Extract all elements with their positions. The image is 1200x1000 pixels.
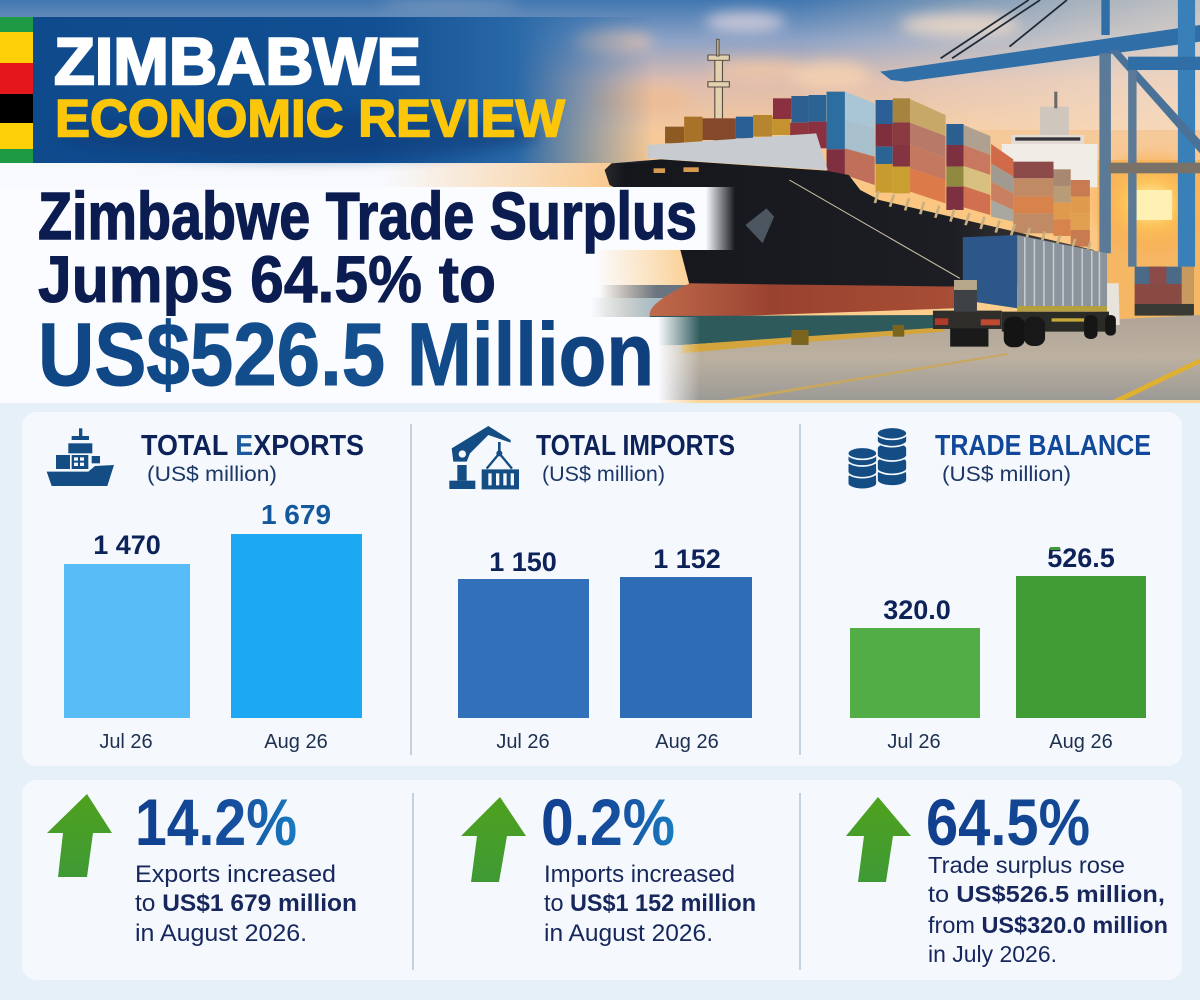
hero photo: cargo ship at port bbox=[0, 0, 1200, 403]
description: Trade surplus rose bbox=[928, 852, 1125, 878]
banner subtitle: ECONOMIC REVIEW: ECONOMIC REVIEW bbox=[55, 90, 565, 148]
axis labels: Jul 26 bbox=[99, 731, 153, 753]
stat: trade surplus bbox=[846, 785, 1168, 967]
unit: (US$ million) bbox=[542, 463, 665, 486]
value 1 679: 1 679 bbox=[261, 499, 331, 530]
ground bbox=[600, 315, 1200, 400]
heading: TOTAL IMPORTS bbox=[536, 430, 735, 462]
pale sky band behind bow bbox=[0, 250, 700, 317]
distant superstructure bbox=[1002, 92, 1098, 187]
axis labels bbox=[496, 731, 719, 753]
bar Aug 26 bbox=[231, 534, 362, 718]
value 1 470: 1 470 bbox=[93, 530, 161, 560]
value 526.5: 526.5 bbox=[1047, 543, 1115, 573]
stat: exports bbox=[47, 785, 357, 947]
description: Imports increased bbox=[544, 861, 735, 888]
ship mast bbox=[708, 39, 729, 140]
white headline backing fades bbox=[0, 163, 735, 403]
unit: (US$ million) bbox=[147, 463, 277, 486]
icon: up arrow bbox=[461, 797, 526, 882]
icon: up arrow bbox=[846, 797, 911, 882]
top banner bbox=[33, 17, 653, 163]
axis labels bbox=[887, 731, 1113, 753]
bar Aug 26 bbox=[1016, 576, 1146, 718]
chart: total exports bbox=[47, 428, 364, 753]
bar Jul 26 bbox=[850, 628, 980, 718]
far containers truck bbox=[1135, 267, 1194, 316]
containers bbox=[665, 92, 1090, 247]
description: from US$320.0 million bbox=[928, 912, 1168, 938]
description: Exports increased bbox=[135, 861, 336, 888]
panel: percentage changes bbox=[22, 780, 1182, 980]
description: in August 2026. bbox=[544, 920, 713, 947]
truck bbox=[933, 235, 1120, 347]
hull red waterline bbox=[650, 283, 956, 316]
stat: imports bbox=[461, 785, 756, 947]
description: to US$1 152 million bbox=[544, 890, 756, 917]
axis labels: Aug 26 bbox=[1049, 731, 1113, 753]
bar Jul 26 bbox=[64, 564, 190, 718]
description bbox=[928, 852, 1168, 967]
deck railing bbox=[876, 197, 1094, 250]
description: to US$1 679 million bbox=[135, 890, 357, 917]
icon: up arrow bbox=[47, 794, 112, 877]
axis labels: Aug 26 bbox=[264, 731, 328, 753]
percentage: 64.5% bbox=[926, 785, 1090, 859]
chart: total imports bbox=[449, 426, 752, 753]
unit: (US$ million) bbox=[942, 463, 1071, 486]
description bbox=[135, 861, 357, 947]
value 1 150: 1 150 bbox=[489, 547, 557, 577]
icon: coin stacks bbox=[848, 427, 907, 489]
description bbox=[544, 861, 756, 947]
crane bbox=[880, 0, 1200, 267]
heading: TOTAL EXPORTS bbox=[141, 430, 364, 462]
axis labels bbox=[99, 731, 328, 753]
value 1 152: 1 152 bbox=[653, 544, 721, 574]
icon: cargo ship bbox=[47, 428, 114, 486]
value 320.0: 320.0 bbox=[883, 595, 951, 625]
heading: TRADE BALANCE bbox=[935, 430, 1151, 462]
panel: bar charts bbox=[22, 412, 1182, 766]
chart: trade balance bbox=[848, 427, 1151, 753]
icon: port crane bbox=[449, 426, 519, 489]
banner title: ZIMBABWE: ZIMBABWE bbox=[54, 24, 421, 98]
headline bbox=[38, 179, 697, 404]
distant shoreline bbox=[590, 285, 695, 317]
anchor bbox=[745, 208, 774, 243]
deck house bbox=[648, 133, 828, 170]
Zimbabwe flag stripe bbox=[0, 17, 33, 163]
percentage: 0.2% bbox=[541, 785, 675, 859]
water bbox=[650, 315, 944, 347]
axis labels: Aug 26 bbox=[655, 731, 719, 753]
headline: Jumps 64.5% to bbox=[38, 242, 496, 316]
axis labels: Jul 26 bbox=[887, 731, 941, 753]
bow markings bbox=[654, 167, 699, 173]
bar Aug 26 bbox=[620, 577, 752, 718]
percentage: 14.2% bbox=[135, 785, 297, 859]
description: in August 2026. bbox=[135, 920, 307, 947]
headline: Zimbabwe Trade Surplus bbox=[38, 179, 697, 254]
description: in July 2026. bbox=[928, 941, 1057, 967]
axis labels: Jul 26 bbox=[496, 731, 550, 753]
hull bbox=[605, 159, 1101, 287]
bar Jul 26 bbox=[458, 579, 589, 718]
headline: US$526.5 Million bbox=[38, 304, 654, 404]
description: to US$526.5 million, bbox=[928, 881, 1165, 907]
